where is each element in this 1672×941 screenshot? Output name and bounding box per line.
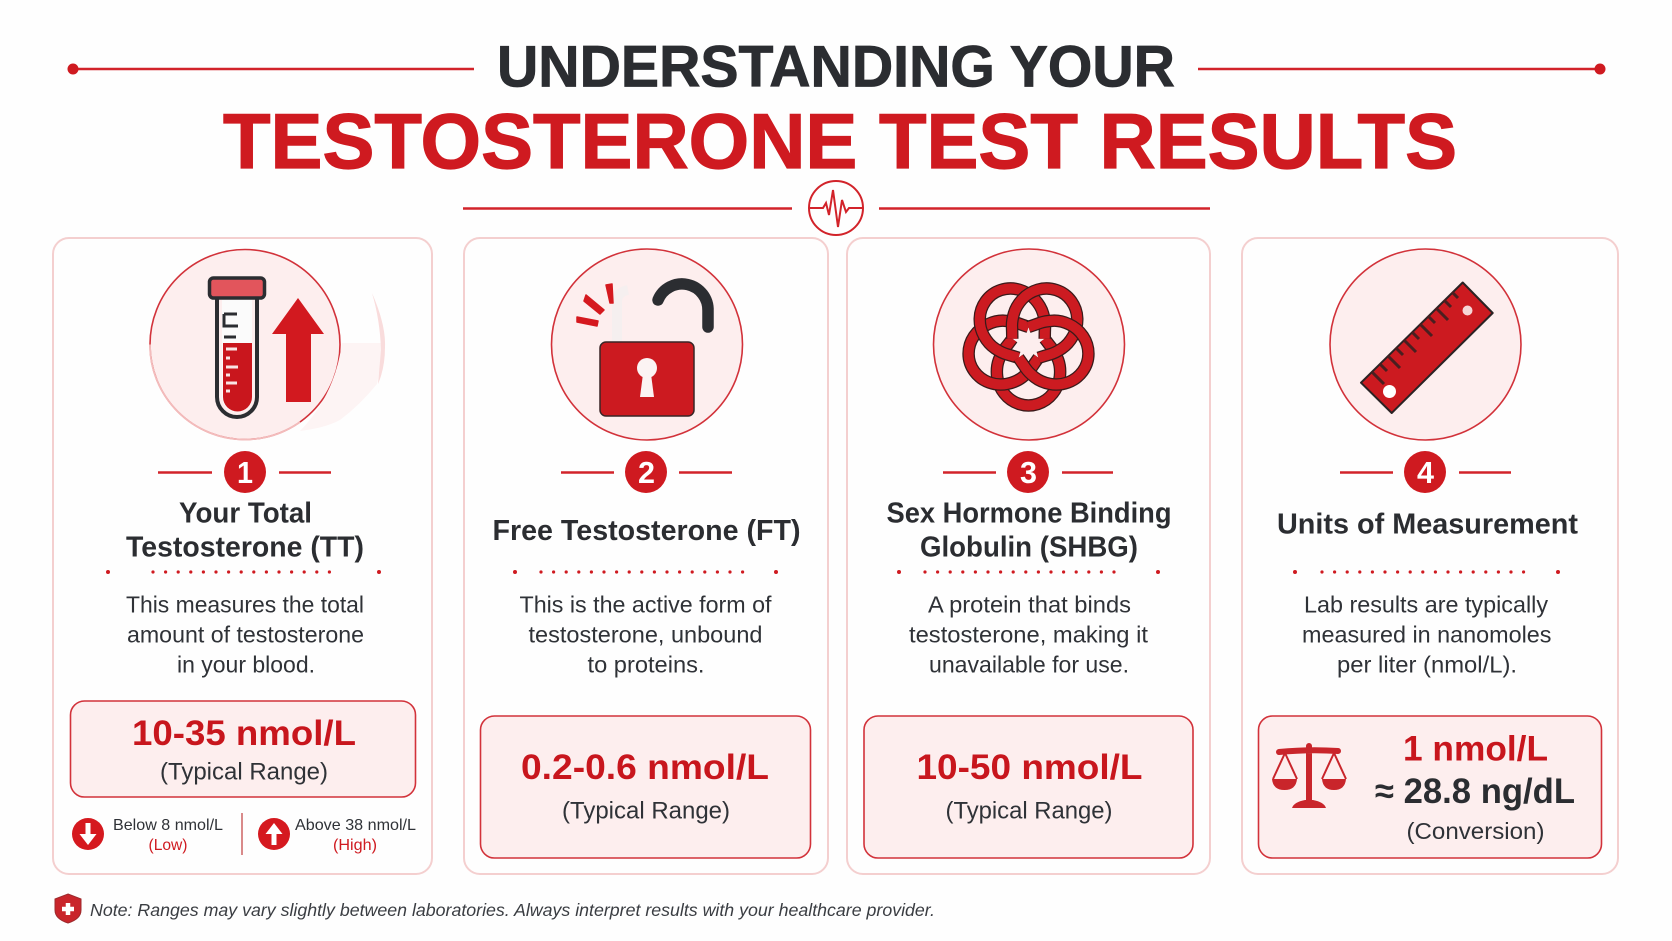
heading: Units of Measurement	[1277, 508, 1578, 540]
icon: protein knot	[934, 249, 1124, 440]
description: Lab results are typically	[1304, 592, 1548, 618]
number badge 1: 1	[237, 455, 253, 490]
description: per liter (nmol/L).	[1337, 652, 1517, 678]
description: unavailable for use.	[929, 652, 1129, 678]
description	[126, 592, 364, 678]
icon: ruler	[1330, 249, 1521, 440]
threshold separator	[241, 813, 243, 855]
note text: Note: Ranges may vary slightly between laboratories. Always interpret results with your healthcare provider.	[90, 900, 935, 920]
icon: balance scales	[1272, 746, 1346, 808]
description: in your blood.	[177, 652, 315, 678]
number badge 3	[943, 451, 1113, 493]
heading: Your Total	[179, 498, 312, 530]
icon: test tube and up arrow	[150, 250, 385, 440]
panel: free testosterone	[464, 238, 828, 874]
description: amount of testosterone	[127, 622, 364, 648]
heading	[126, 498, 364, 564]
heading: Free Testosterone (FT)	[492, 515, 800, 547]
title line 2: TESTOSTERONE TEST RESULTS	[223, 97, 1457, 185]
range box	[480, 716, 810, 858]
left title rule	[68, 64, 474, 74]
low threshold: Below 8 nmol/L	[113, 817, 223, 834]
description	[909, 592, 1148, 678]
description: This measures the total	[126, 592, 364, 618]
high threshold	[258, 817, 416, 854]
range box: 10-50 nmol/L	[916, 747, 1142, 787]
range box	[864, 716, 1193, 858]
heartbeat divider	[463, 181, 1210, 235]
number badge 4	[1340, 451, 1511, 493]
heading: Globulin (SHBG)	[920, 532, 1138, 564]
dotted divider	[106, 570, 381, 574]
title line 1: UNDERSTANDING YOUR	[497, 34, 1175, 100]
number badge 2	[561, 451, 732, 493]
description: A protein that binds	[928, 592, 1131, 618]
dotted divider	[1293, 570, 1560, 574]
conversion box: ≈ 28.8 ng/dL	[1375, 771, 1575, 811]
range box: 0.2-0.6 nmol/L	[521, 747, 769, 787]
number badge 4: 4	[1417, 455, 1435, 490]
range box: (Typical Range)	[160, 759, 328, 786]
dotted divider	[513, 570, 778, 574]
range box: (Typical Range)	[562, 798, 730, 824]
number badge 2: 2	[638, 455, 655, 490]
heading: Sex Hormone Binding	[886, 498, 1172, 530]
number badge 1	[158, 451, 331, 493]
low threshold	[72, 817, 223, 854]
heading: Testosterone (TT)	[126, 532, 364, 564]
number badge 3: 3	[1020, 455, 1037, 490]
description: measured in nanomoles	[1302, 622, 1552, 648]
range box: (Typical Range)	[946, 798, 1112, 824]
conversion box: (Conversion)	[1406, 818, 1544, 844]
icon: open padlock	[552, 249, 742, 440]
description	[1302, 592, 1552, 678]
range box: 10-35 nmol/L	[132, 713, 356, 753]
description: testosterone, unbound	[528, 622, 762, 648]
high threshold: (High)	[333, 837, 377, 854]
conversion box: 1 nmol/L	[1403, 728, 1548, 768]
footnote	[55, 894, 935, 923]
right title rule	[1198, 64, 1606, 74]
heading	[886, 498, 1172, 564]
range box	[70, 701, 416, 797]
header	[68, 34, 1606, 235]
high threshold: Above 38 nmol/L	[295, 817, 416, 834]
conversion box	[1258, 716, 1602, 858]
panel: SHBG	[847, 238, 1210, 874]
low threshold: (Low)	[148, 837, 188, 854]
dotted divider	[897, 570, 1160, 574]
description	[520, 592, 772, 678]
panel: units of measurement	[1242, 238, 1618, 874]
description: to proteins.	[588, 652, 704, 678]
panel: total testosterone	[53, 238, 432, 874]
description: This is the active form of	[520, 592, 772, 618]
description: testosterone, making it	[909, 622, 1148, 648]
icon: medical shield	[55, 894, 81, 923]
